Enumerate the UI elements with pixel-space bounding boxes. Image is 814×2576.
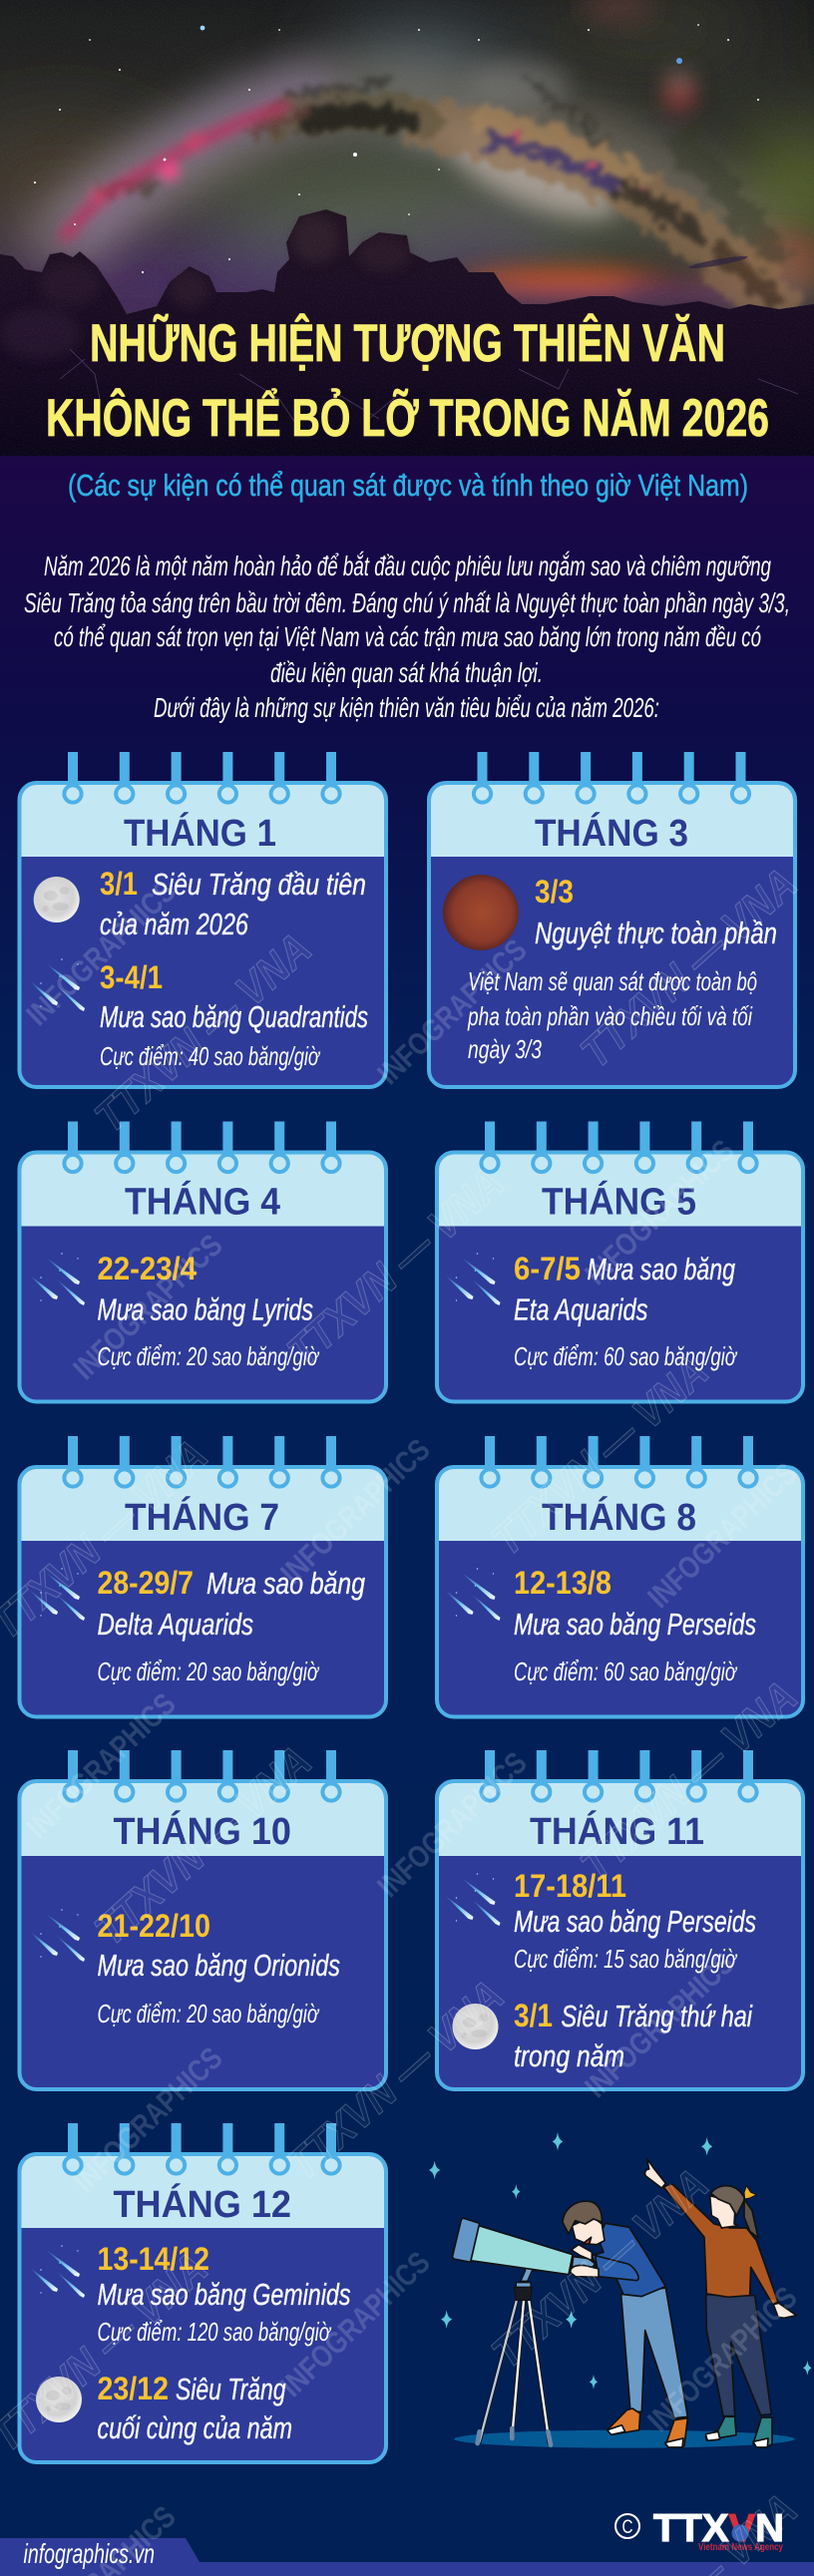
panel: Tháng 11 [437,1750,803,2089]
intro text [24,551,790,723]
event: supermoon: Siêu Trăng [176,2372,285,2406]
event: Lyrids: 22-23/4 [98,1251,197,1287]
event: Delta Aquarids: Delta Aquarids [98,1607,253,1642]
watermarks: INFOGRAPHICS [371,932,534,1091]
icon: meteors [445,1253,501,1305]
watermarks [0,859,807,2576]
man [563,2201,687,2447]
watermarks: TTXVN — VNA [483,2159,718,2378]
watermarks: INFOGRAPHICS [67,1228,229,1386]
watermarks: TTXVN — VNA [86,1736,321,1955]
event: Quadrantids: Cực điểm: 40 sao băng/giờ [100,1041,321,1071]
illustration: stargazers with telescope [429,2132,812,2448]
panel: Tháng 5 [437,1121,803,1402]
heading: THÁNG 1 [124,811,276,855]
calendar frame [429,752,795,1087]
heading: THÁNG 8 [542,1495,696,1539]
calendar frame [437,1436,803,1717]
watermarks: TTXVN — VNA [278,1158,514,1376]
heading: THÁNG 10 [114,1809,291,1853]
watermarks: INFOGRAPHICS [67,2040,229,2199]
event: supermoon: 23/12 [98,2371,169,2406]
event: Quadrantids [100,959,368,1071]
event: supermoon [98,2371,292,2445]
watermarks: INFOGRAPHICS [579,1946,741,2104]
heading: THÁNG 3 [535,811,688,855]
panel: Tháng 3 [429,752,795,1087]
event: supermoon: 3/1 [514,1998,553,2033]
event: Orionids: Mưa sao băng Orionids [98,1948,340,1983]
event: Orionids: Cực điểm: 20 sao băng/giờ [98,1999,320,2028]
event: Orionids [98,1908,340,2028]
event: supermoon: của năm 2026 [100,907,249,941]
telescope [453,2218,596,2275]
ground [454,2430,795,2448]
icon: meteors [29,1568,85,1621]
event: supermoon [100,866,366,941]
calendar frame [437,1750,803,2089]
calendar frame [20,1436,386,1717]
watermarks: INFOGRAPHICS [20,874,183,1032]
event: Geminids: Cực điểm: 120 sao băng/giờ [98,2317,332,2347]
woman [645,2159,796,2447]
event: Eta Aquarids: Mưa sao băng [587,1252,735,1287]
event: Geminids [98,2241,351,2347]
event: Perseids [514,1868,756,1974]
calendar frame [20,2123,386,2462]
event: Lyrids: Cực điểm: 20 sao băng/giờ [98,1341,320,1371]
icon: meteors [445,1568,501,1621]
watermarks: INFOGRAPHICS [20,1686,183,1845]
panel: Tháng 12 [20,2123,386,2462]
event: Lyrids [98,1251,320,1371]
heading: THÁNG 12 [114,2182,291,2226]
event: Geminids: Mưa sao băng Geminids [98,2277,351,2312]
event: supermoon [514,1998,753,2073]
event: supermoon: 3/1 [100,866,138,902]
event: Eta Aquarids: 6-7/5 [514,1251,581,1287]
footer band [0,2538,814,2576]
calendar frame [437,1121,803,1402]
watermarks: INFOGRAPHICS [274,2245,437,2403]
watermarks: TTXVN — VNA [278,1971,514,2189]
icon: meteors [29,1253,85,1305]
icon: blood moon [443,875,519,950]
panel: Tháng 8 [437,1436,803,1717]
event: supermoon: cuối cùng của năm [98,2410,292,2445]
panel: Tháng 7 [20,1436,386,1717]
event: Quadrantids: Mưa sao băng Quadrantids [100,999,368,1034]
calendar frame [20,752,386,1087]
watermarks: TTXVN — VNA [86,923,321,1142]
event: supermoon: Siêu Trăng đầu tiên [152,867,366,902]
panel: Tháng 1 [20,752,386,1087]
icon: meteors [29,2245,85,2298]
icon: meteors [445,1873,501,1926]
event date: 3/3 [535,874,574,910]
event: supermoon: trong năm [514,2038,624,2073]
stars [429,2132,812,2390]
event: Delta Aquarids [98,1565,365,1686]
heading: THÁNG 5 [542,1179,696,1223]
heading: THÁNG 7 [125,1495,279,1539]
logo: TTXVN: TTXVN [653,2507,784,2550]
icon: moon [34,877,80,922]
event: Geminids: 13-14/12 [98,2241,209,2277]
event: Perseids: 17-18/11 [514,1868,626,1904]
footer url: infographics.vn [24,2538,155,2569]
event: Delta Aquarids: 28-29/7 [98,1565,194,1601]
watermarks: INFOGRAPHICS [579,1133,741,1291]
calendar frame [20,1750,386,2089]
watermarks: TTXVN — VNA [483,1346,718,1565]
event: Perseids [514,1565,756,1686]
event: Delta Aquarids: Mưa sao băng [206,1566,365,1601]
event: Orionids: 21-22/10 [98,1908,210,1944]
event: Eta Aquarids: Eta Aquarids [514,1292,648,1326]
event: Perseids: 12-13/8 [514,1565,611,1601]
event: Quadrantids: 3-4/1 [100,959,163,995]
heading: THÁNG 4 [125,1179,280,1223]
icon: moon [453,2004,499,2049]
tripod [478,2265,551,2445]
calendar frame [20,1121,386,1402]
event: Lyrids: Mưa sao băng Lyrids [98,1292,313,1326]
icon: moon [36,2377,82,2422]
logo: TTXVN: C [622,2517,632,2538]
panel: Tháng 4 [20,1121,386,1402]
title [46,312,769,448]
watermarks: INFOGRAPHICS [371,1745,534,1904]
event: supermoon: Siêu Trăng thứ hai [561,1999,753,2033]
heading: THÁNG 11 [530,1809,704,1853]
panel: Tháng 10 [20,1750,386,2089]
logo: TTXVN: Vietnam News Agency [698,2542,783,2553]
hero photo: milky way over rocks [0,0,814,456]
intro text: điều kiện quan sát khá thuận lợi. [270,657,543,688]
watermarks: INFOGRAPHICS [274,1432,437,1591]
event: Eta Aquarids [514,1251,738,1371]
event description: ngày 3/3 [468,1034,542,1064]
icon: meteors [29,1909,85,1962]
event: Delta Aquarids: Cực điểm: 20 sao băng/giờ [98,1656,320,1686]
icon: meteors [29,958,85,1011]
event description [467,966,757,1064]
